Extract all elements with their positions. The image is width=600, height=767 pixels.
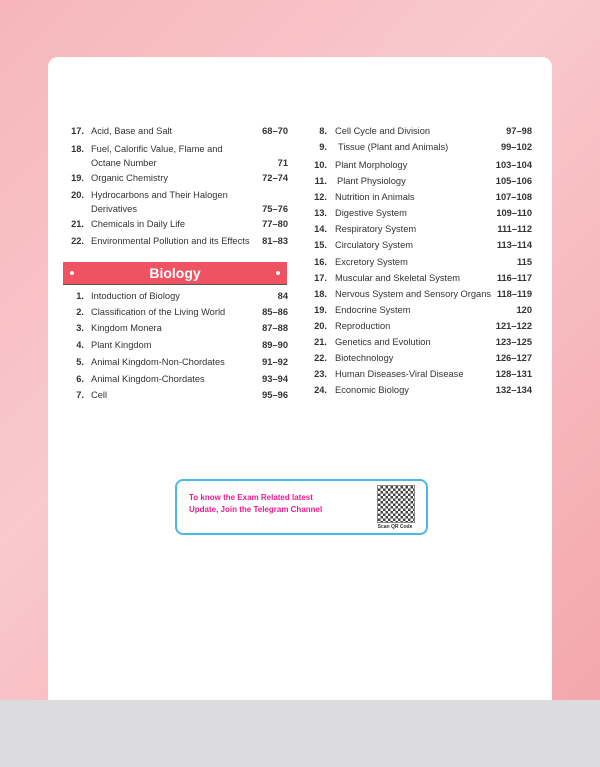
heading: Biology banner: Biology xyxy=(149,265,201,281)
list: biology left column: 95–96 xyxy=(262,390,288,400)
list: biology right column: 21. xyxy=(314,337,327,347)
list: biology right column: 20. xyxy=(314,321,327,331)
list: biology left column: 7. xyxy=(76,390,84,400)
list: chemistry left column: 72–74 xyxy=(262,173,288,183)
list: biology right column: Plant Physiology xyxy=(337,176,406,186)
list: biology right column: Circulatory System xyxy=(335,240,413,250)
list: biology right column: 111–112 xyxy=(497,224,532,234)
list: biology left column: Animal Kingdom-Non-Chordates xyxy=(91,357,225,367)
list: biology right column: 15. xyxy=(314,240,327,250)
list: biology right column: 109–110 xyxy=(496,208,532,218)
list: biology right column: 103–104 xyxy=(496,160,532,170)
list: biology right column: Reproduction xyxy=(335,321,390,331)
list: biology right column: Genetics and Evolution xyxy=(335,337,431,347)
list: biology left column: 1. xyxy=(76,291,84,301)
panel: contents xyxy=(48,57,552,700)
list: biology right column: 115 xyxy=(517,257,532,267)
list: chemistry left column xyxy=(71,126,288,246)
list: chemistry left column: Acid, Base and Salt xyxy=(91,126,172,136)
list: biology right column: 107–108 xyxy=(496,192,532,202)
list: chemistry left column: Environmental Pollution and its Effects xyxy=(91,236,249,246)
list: biology right column: 18. xyxy=(314,289,327,299)
list: biology right column: 116–117 xyxy=(497,273,532,283)
list: chemistry left column: 71 xyxy=(278,158,288,168)
list: chemistry left column: 68–70 xyxy=(262,126,288,136)
list: chemistry left column: 77–80 xyxy=(262,219,288,229)
list: biology right column: Muscular and Skeletal System xyxy=(335,273,460,283)
list: biology right column: 128–131 xyxy=(496,369,532,379)
list: biology right column: Human Diseases-Viral Disease xyxy=(335,369,464,379)
list: biology left column: 4. xyxy=(76,340,84,350)
list: biology right column: 118–119 xyxy=(497,289,532,299)
list: biology right column: 24. xyxy=(314,385,327,395)
list: biology left column xyxy=(76,291,288,400)
list: chemistry left column: Organic Chemistry xyxy=(91,173,168,183)
list: biology right column: 17. xyxy=(314,273,327,283)
list: biology left column: Kingdom Monera xyxy=(91,323,162,333)
list: biology right column: 22. xyxy=(314,353,327,363)
list: biology right column: Endocrine System xyxy=(335,305,410,315)
list: biology right column: 99–102 xyxy=(501,142,532,152)
list: biology right column: Excretory System xyxy=(335,257,408,267)
list: biology right column: 19. xyxy=(314,305,327,315)
list: biology right column: 11. xyxy=(315,176,327,186)
list: biology left column: 5. xyxy=(76,357,84,367)
list: biology right column xyxy=(314,126,532,395)
list: biology right column: 126–127 xyxy=(496,353,532,363)
list: chemistry left column: 22. xyxy=(71,236,84,246)
list: biology right column: Respiratory System xyxy=(335,224,416,234)
list: biology left column: 91–92 xyxy=(262,357,288,367)
list: chemistry left column: 81–83 xyxy=(262,236,288,246)
list: biology right column: 23. xyxy=(314,369,327,379)
list: biology left column: Plant Kingdom xyxy=(91,340,151,350)
list: biology right column: 13. xyxy=(314,208,327,218)
list: biology right column: 120 xyxy=(516,305,532,315)
list: biology left column: 85–86 xyxy=(262,307,288,317)
list: chemistry left column: Fuel, Calorific Value, Flame and Octane Number xyxy=(91,144,223,168)
list: biology right column: 121–122 xyxy=(496,321,532,331)
list: biology left column: Classification of the Living World xyxy=(91,307,225,317)
list: biology right column: 14. xyxy=(314,224,327,234)
list: biology right column: Tissue (Plant and Animals) xyxy=(338,142,448,152)
list: biology left column: 84 xyxy=(278,291,288,301)
list: biology right column: 8. xyxy=(319,126,327,136)
list: biology left column: 3. xyxy=(76,323,84,333)
list: chemistry left column: 18. xyxy=(71,144,84,154)
list: chemistry left column: 20. xyxy=(71,190,84,200)
list: biology right column: 9. xyxy=(319,142,327,152)
list: biology right column: Plant Morphology xyxy=(335,160,407,170)
list: chemistry left column: Hydrocarbons and Their Halogen Derivatives xyxy=(91,190,228,214)
list: biology left column: Intoduction of Biology xyxy=(91,291,180,301)
list: biology right column: Cell Cycle and Division xyxy=(335,126,430,136)
list: biology left column: Cell xyxy=(91,390,107,400)
list: biology right column: Economic Biology xyxy=(335,385,409,395)
list: biology right column: Digestive System xyxy=(335,208,407,218)
list: biology right column: 12. xyxy=(314,192,327,202)
text: telegram message xyxy=(189,493,322,514)
list: biology right column: 132–134 xyxy=(496,385,532,395)
list: chemistry left column: 21. xyxy=(71,219,84,229)
list: biology left column: 87–88 xyxy=(262,323,288,333)
text: telegram message: Update, Join the Telegram Channel xyxy=(189,505,322,514)
list: biology left column: 6. xyxy=(76,374,84,384)
list: biology right column: 97–98 xyxy=(506,126,532,136)
list: chemistry left column: 17. xyxy=(71,126,84,136)
heading: Biology banner xyxy=(63,262,287,285)
callout: telegram box xyxy=(175,479,428,535)
list: biology right column: Biotechnology xyxy=(335,353,393,363)
list: biology right column: 16. xyxy=(314,257,327,267)
list: biology right column: 105–106 xyxy=(496,176,532,186)
text: scan QR code: Scan QR Code xyxy=(378,524,412,530)
text: telegram message: To know the Exam Related latest xyxy=(189,493,313,502)
list: biology right column: Nutrition in Animals xyxy=(335,192,415,202)
list: biology right column: 10. xyxy=(314,160,327,170)
list: biology left column: 93–94 xyxy=(262,374,288,384)
list: biology right column: 123–125 xyxy=(496,337,532,347)
list: biology left column: 89–90 xyxy=(262,340,288,350)
list: biology right column: 113–114 xyxy=(497,240,532,250)
list: chemistry left column: Chemicals in Daily Life xyxy=(91,219,185,229)
list: biology right column: Nervous System and Sensory Organs xyxy=(335,289,491,299)
list: biology left column: 2. xyxy=(76,307,84,317)
list: biology left column: Animal Kingdom-Chordates xyxy=(91,374,205,384)
list: chemistry left column: 75–76 xyxy=(262,204,288,214)
icon: QR code xyxy=(377,485,415,523)
list: chemistry left column: 19. xyxy=(71,173,84,183)
